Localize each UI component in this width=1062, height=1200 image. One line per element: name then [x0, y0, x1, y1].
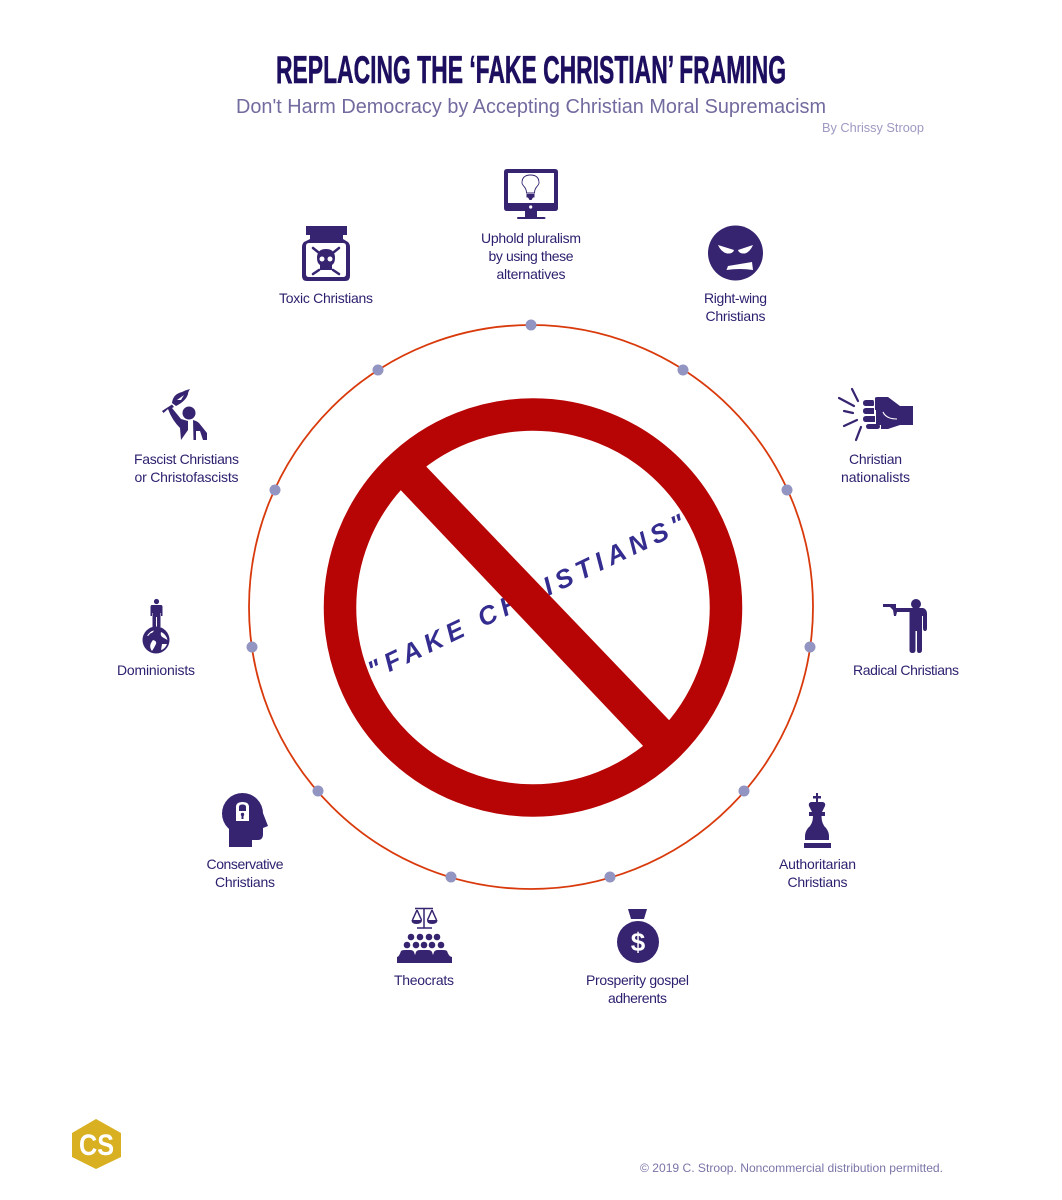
byline: By Chrissy Stroop — [822, 120, 924, 135]
icon: man with gun — [883, 599, 927, 653]
label: by using these — [488, 248, 574, 264]
label: nationalists — [841, 469, 910, 485]
label: Authoritarian — [779, 856, 856, 872]
prohibition sign over "fake Christians" — [340, 414, 726, 800]
logo: CS hexagon — [72, 1119, 121, 1169]
orange ring with dots — [246, 320, 816, 889]
red ring — [340, 414, 726, 800]
item: prosperity gospel adherents — [586, 909, 689, 1006]
label: Toxic Christians — [279, 290, 373, 306]
icon: man standing on globe — [142, 599, 170, 654]
label: Theocrats — [394, 972, 454, 988]
label: Fascist Christians — [134, 451, 239, 467]
icon: figure raising torch — [162, 389, 207, 440]
label: Prosperity gospel — [586, 972, 689, 988]
slanted phrase: "FAKE CHRISTIANS" — [363, 508, 690, 685]
item: uphold pluralism — [481, 169, 581, 282]
label: Radical Christians — [853, 662, 959, 678]
label: Uphold pluralism — [481, 230, 581, 246]
icon: chess king — [804, 793, 831, 848]
copyright note: © 2019 C. Stroop. Noncommercial distribution permitted. — [640, 1161, 943, 1175]
icon: monitor with light bulb — [504, 169, 558, 219]
label: Right-wing — [704, 290, 767, 306]
label: Christian — [849, 451, 902, 467]
item: fascist Christians — [134, 389, 239, 485]
item: authoritarian Christians — [779, 793, 856, 890]
icon: angry face — [708, 226, 763, 280]
icon: money bag: $ — [631, 927, 646, 957]
red slash — [394, 459, 690, 768]
item: dominionists — [117, 599, 195, 678]
item: right-wing Christians — [704, 226, 767, 324]
item: radical Christians — [853, 599, 959, 678]
subtitle: Don't Harm Democracy by Accepting Christian Moral Supremacism — [236, 96, 826, 118]
icon: head with padlock — [222, 793, 268, 847]
label: adherents — [608, 990, 667, 1006]
item: theocrats — [394, 908, 454, 988]
label: alternatives — [496, 266, 566, 282]
label: Christians — [215, 874, 275, 890]
label: Dominionists — [117, 662, 195, 678]
item: conservative Christians — [206, 793, 284, 890]
icon: poison jar with skull — [302, 226, 350, 281]
item: Christian nationalists — [839, 389, 913, 485]
label: or Christofascists — [134, 469, 238, 485]
label: Christians — [706, 308, 766, 324]
label: Conservative — [206, 856, 284, 872]
item: toxic Christians — [279, 226, 373, 306]
logo: CS hexagon: CS — [79, 1129, 114, 1162]
label: Christians — [788, 874, 848, 890]
icon: fist with impact lines — [839, 389, 913, 440]
icon: scales above congregation — [397, 908, 452, 963]
